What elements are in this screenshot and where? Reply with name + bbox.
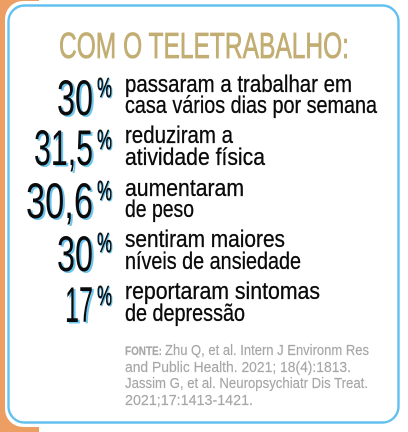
stat row: 30% home working: %: [97, 72, 112, 103]
stat row: 17% depression: de depressão: [125, 300, 245, 327]
stat row: 30,6% weight gain: 30,6: [26, 173, 93, 229]
stat row: 30,6% weight gain: 30,6: [28, 174, 95, 230]
stat row: 30% anxiety: 30: [59, 228, 95, 284]
stat row: 30% home working: 30: [57, 70, 93, 126]
source note: [125, 343, 369, 409]
stat row: 30% anxiety: %: [97, 227, 112, 258]
source note: FONTE:: [125, 344, 162, 358]
stat row: 30,6% weight gain: %: [98, 176, 113, 207]
orange background strip: [0, 0, 39, 432]
source note: 2021;17:1413-1421.: [125, 393, 253, 409]
stat row: 31,5% less physical activity: %: [97, 124, 112, 155]
stat row: 31,5% less physical activity: [34, 120, 266, 178]
stat row: 30,6% weight gain: de peso: [125, 196, 194, 223]
stat row: 30% home working: %: [98, 73, 113, 104]
stat row: 30% home working: passaram a trabalhar em: [125, 71, 352, 98]
stat row: 30% anxiety: sentiram maiores: [125, 226, 285, 253]
stat row: 17% depression: %: [98, 281, 113, 312]
stat row: 30% anxiety: níveis de ansiedade: [125, 248, 301, 275]
stat row: 17% depression: [65, 277, 320, 334]
stat row: 30% home working: 30: [59, 72, 95, 128]
stat row: 17% depression: reportaram sintomas: [125, 278, 320, 305]
source note: Jassim G, et al. Neuropsychiatr Dis Treat.: [125, 376, 368, 392]
stat row: 31,5% less physical activity: reduziram a: [125, 122, 234, 149]
stat row: 30% home working: [57, 70, 378, 128]
stat row: 17% depression: %: [97, 280, 112, 311]
stat row: 30,6% weight gain: %: [97, 175, 112, 206]
source note: and Public Health. 2021; 18(4):1813.: [125, 360, 351, 376]
stat row: 17% depression: 17: [67, 278, 95, 334]
stat row: 30% anxiety: [57, 226, 301, 284]
stat row: 30% anxiety: %: [98, 228, 113, 259]
stat row: 30,6% weight gain: aumentaram: [125, 175, 244, 202]
source note: Zhu Q, et al. Intern J Environm Res: [165, 343, 369, 359]
stat row: 31,5% less physical activity: 31,5: [36, 122, 95, 178]
stat row: 30% anxiety: 30: [57, 226, 93, 282]
stat row: 31,5% less physical activity: atividade física: [125, 144, 266, 171]
stat row: 30,6% weight gain: [26, 173, 244, 230]
stat row: 31,5% less physical activity: 31,5: [34, 120, 93, 176]
stat row: 31,5% less physical activity: %: [98, 125, 113, 156]
stat row: 17% depression: 17: [65, 277, 93, 333]
